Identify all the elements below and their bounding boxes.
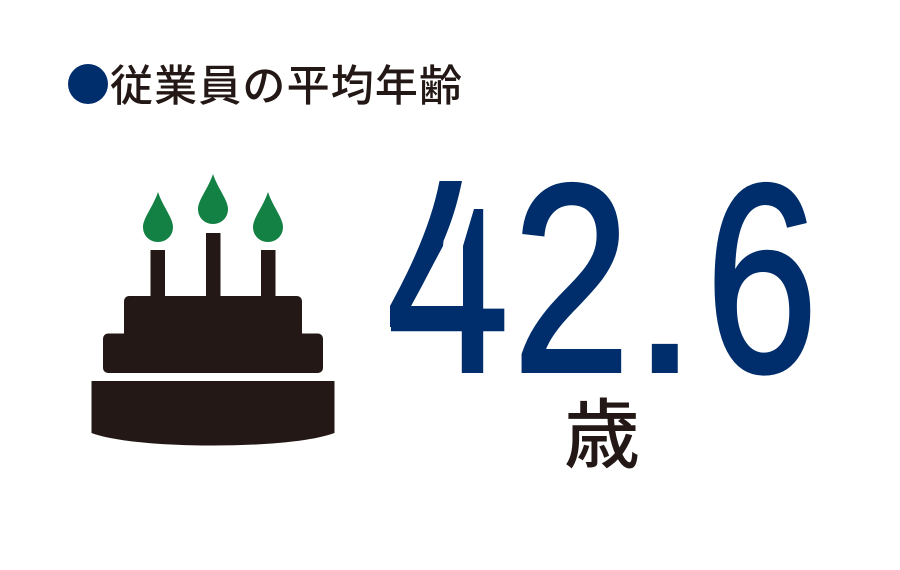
average age value: 4 — [388, 129, 509, 428]
heading bullet — [68, 64, 108, 104]
average age value: . — [627, 127, 703, 431]
candles and cake tiers — [92, 233, 334, 446]
average age value: 2 — [512, 129, 630, 429]
average age value: 6 — [706, 130, 818, 429]
candle flames — [143, 174, 283, 242]
average age value — [388, 127, 818, 431]
icon: birthday cake — [92, 174, 334, 446]
unit: years old: 歳 — [564, 394, 640, 479]
heading: 従業員の平均年齢 — [110, 63, 462, 111]
